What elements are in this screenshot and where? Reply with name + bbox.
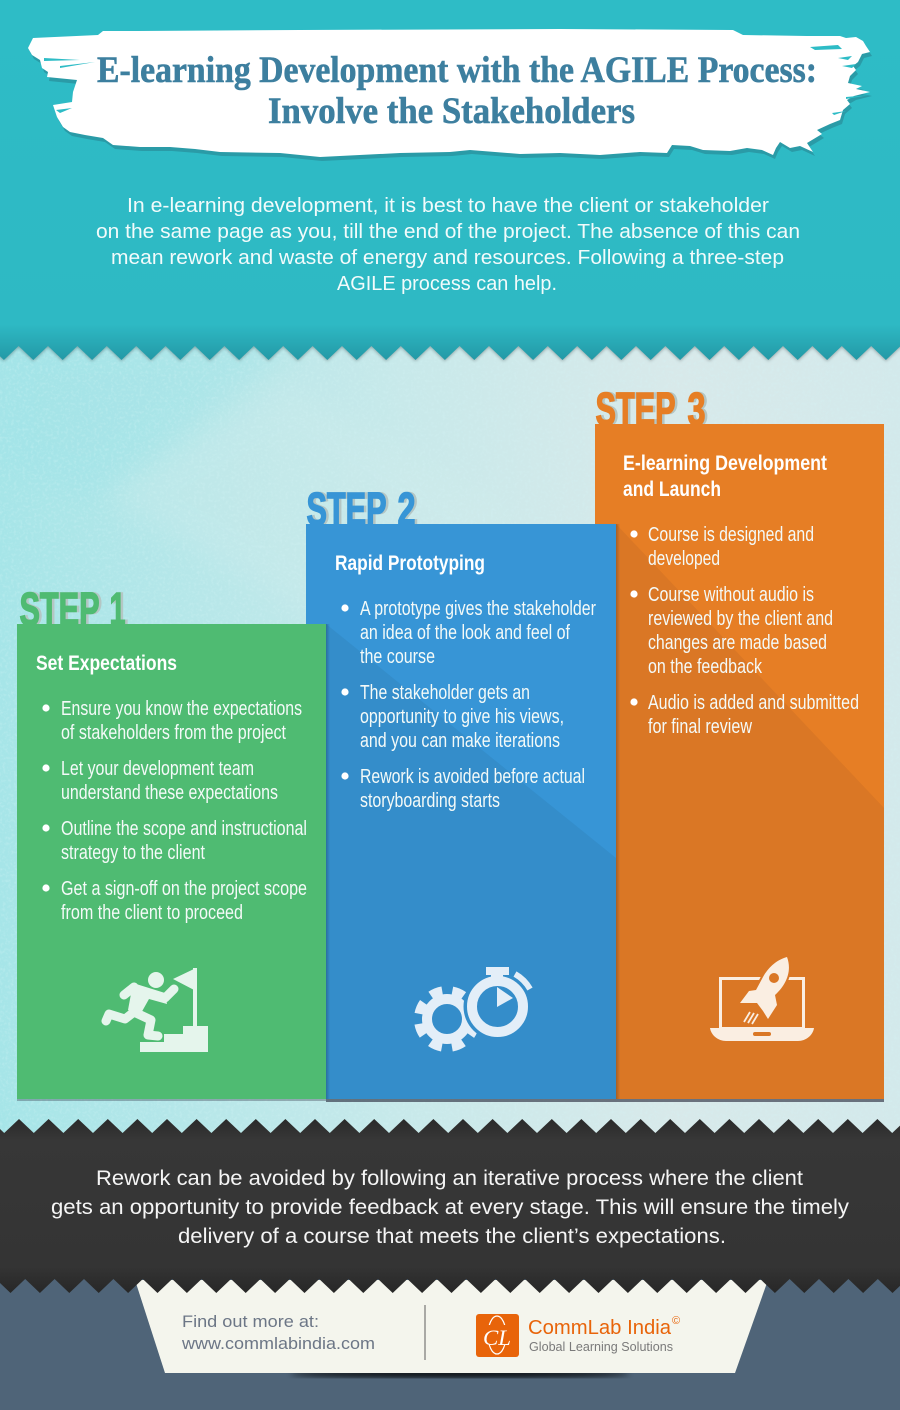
step 1 bullet list: understand these expectations — [61, 782, 278, 804]
step 3 subheading: and Launch — [623, 478, 721, 501]
step 1 heading: 1 — [110, 583, 126, 635]
step 3 bullet list: developed — [648, 548, 720, 570]
step 2 bullet list: and you can make iterations — [360, 730, 560, 752]
step 1 bullet list — [42, 698, 307, 924]
step 3 bullet list: Course without audio is — [648, 584, 814, 606]
title: E-learning Development with the AGILE Process: — [97, 49, 817, 90]
intro paragraph: on the same page as you, till the end of the project. The absence of this can — [96, 220, 800, 243]
step 2 heading: STEP — [309, 483, 389, 535]
step 2 bullet list: The stakeholder gets an — [360, 682, 530, 704]
step 3 heading: 3 — [688, 383, 706, 435]
logo: CommLab India: © — [672, 1315, 680, 1327]
step 2 bullet list: an idea of the look and feel of — [360, 622, 570, 644]
step 1 bullet list: of stakeholders from the project — [61, 722, 286, 744]
step 2 bullet list: opportunity to give his views, — [360, 706, 564, 728]
intro paragraph: In e-learning development, it is best to have the client or stakeholder — [127, 194, 769, 217]
title: Involve the Stakeholders — [268, 90, 635, 131]
logo: CommLab India: CL — [483, 1325, 511, 1350]
title — [97, 49, 817, 131]
icon: gear and stopwatch — [419, 967, 532, 1047]
step 2 bullet list: A prototype gives the stakeholder — [360, 598, 596, 620]
intro paragraph: mean rework and waste of energy and resources. Following a three-step — [111, 246, 784, 269]
header band — [0, 0, 900, 360]
step 1 bullet list: Outline the scope and instructional — [61, 818, 307, 840]
step 3 bullet list: reviewed by the client and — [648, 608, 833, 630]
step 3 heading: STEP — [596, 383, 676, 435]
dark closing band — [0, 1119, 900, 1293]
step 3 subheading: E-learning Development — [623, 452, 827, 475]
card base shadow — [17, 1099, 884, 1102]
closing paragraph: gets an opportunity to provide feedback at every stage. This will ensure the timely — [51, 1195, 849, 1219]
panel: step 3 — [595, 424, 884, 1099]
step 1 heading: STEP — [20, 583, 100, 635]
step 2 bullet list: the course — [360, 646, 435, 668]
logo: CommLab India: CommLab India — [528, 1317, 672, 1339]
logo: CommLab India — [476, 1314, 680, 1357]
footer panel — [135, 1280, 768, 1378]
step 3 subheading — [623, 452, 827, 501]
background: pale aqua texture — [0, 340, 900, 1140]
panel: step 2 — [306, 524, 616, 1099]
step 1 subheading: Set Expectations — [36, 652, 177, 675]
panel: step 1 — [17, 624, 326, 1099]
footer background — [0, 1275, 900, 1410]
step 3 bullet list: for final review — [648, 716, 752, 738]
step 2 heading: 2 — [398, 483, 416, 535]
intro paragraph — [96, 194, 800, 295]
icon: rocket and laptop — [710, 957, 814, 1041]
closing paragraph: Rework can be avoided by following an iterative process where the client — [96, 1166, 803, 1190]
step 3 heading: 3 — [690, 383, 708, 435]
step 1 bullet list: Ensure you know the expectations — [61, 698, 302, 720]
step 2 heading: 2 — [400, 483, 418, 535]
step 3 heading: STEP — [598, 383, 678, 435]
step 1 heading: 1 — [112, 583, 128, 635]
closing paragraph: delivery of a course that meets the client’s expectations. — [178, 1224, 726, 1248]
icon: runner climbing stairs to flag — [106, 968, 208, 1052]
title brush stroke — [28, 29, 872, 161]
step 1 bullet list: Let your development team — [61, 758, 254, 780]
step 1 bullet list: Get a sign-off on the project scope — [61, 878, 307, 900]
step 3 bullet list: on the feedback — [648, 656, 763, 678]
step 3 bullet list: changes are made based — [648, 632, 827, 654]
logo: CommLab India: Global Learning Solutions — [529, 1340, 673, 1354]
step 3 bullet list — [630, 524, 859, 738]
step 1 heading: STEP — [22, 583, 102, 635]
intro paragraph: AGILE process can help. — [337, 272, 557, 295]
step 1 bullet list: from the client to proceed — [61, 902, 243, 924]
step 2 subheading: Rapid Prototyping — [335, 552, 485, 575]
step 2 bullet list: Rework is avoided before actual — [360, 766, 585, 788]
closing paragraph — [51, 1166, 849, 1248]
step 1 bullet list: strategy to the client — [61, 842, 205, 864]
find out more text: Find out more at: — [182, 1312, 319, 1331]
step 3 bullet list: Course is designed and — [648, 524, 814, 546]
step 2 heading: STEP — [306, 483, 386, 535]
step 2 bullet list — [341, 598, 596, 812]
find out more text: www.commlabindia.com — [181, 1334, 375, 1353]
find out more text — [181, 1312, 375, 1353]
step 2 bullet list: storyboarding starts — [360, 790, 500, 812]
